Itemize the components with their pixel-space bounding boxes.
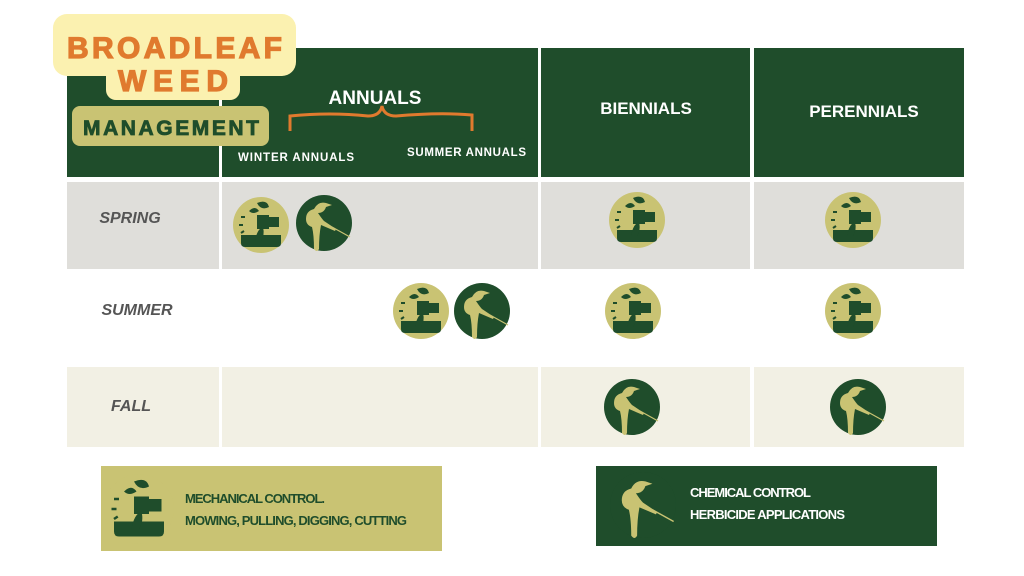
legend: mechanical: MOWING, PULLING, DIGGING, CUTTING xyxy=(185,513,407,528)
legend: chemical: HERBICIDE APPLICATIONS xyxy=(690,507,845,522)
legend: chemical xyxy=(596,466,937,546)
heading: perennials: PERENNIALS xyxy=(809,102,919,121)
legend: mechanical: MECHANICAL CONTROL. xyxy=(185,491,325,506)
icons: summer xyxy=(393,283,881,339)
icons: spring xyxy=(233,192,881,253)
title badge: BROADLEAF xyxy=(67,32,282,65)
title badge: WEED xyxy=(118,65,228,98)
legend: mechanical xyxy=(101,466,442,551)
heading: annuals xyxy=(238,88,526,164)
legend: chemical: CHEMICAL CONTROL xyxy=(690,485,811,500)
heading: annuals: WINTER ANNUALS xyxy=(238,152,354,164)
row: spring xyxy=(67,182,964,269)
row: fall xyxy=(67,367,964,447)
row: fall: FALL xyxy=(111,398,151,415)
row: summer label: SUMMER xyxy=(101,302,173,319)
heading: annuals: ANNUALS xyxy=(329,88,421,109)
row: spring: SPRING xyxy=(99,210,161,227)
heading: biennials: BIENNIALS xyxy=(600,99,692,118)
title badge xyxy=(53,14,296,146)
heading: annuals: SUMMER ANNUALS xyxy=(407,147,526,159)
title badge: MANAGEMENT xyxy=(83,117,259,140)
icons: fall xyxy=(604,379,886,435)
header row xyxy=(67,48,964,177)
